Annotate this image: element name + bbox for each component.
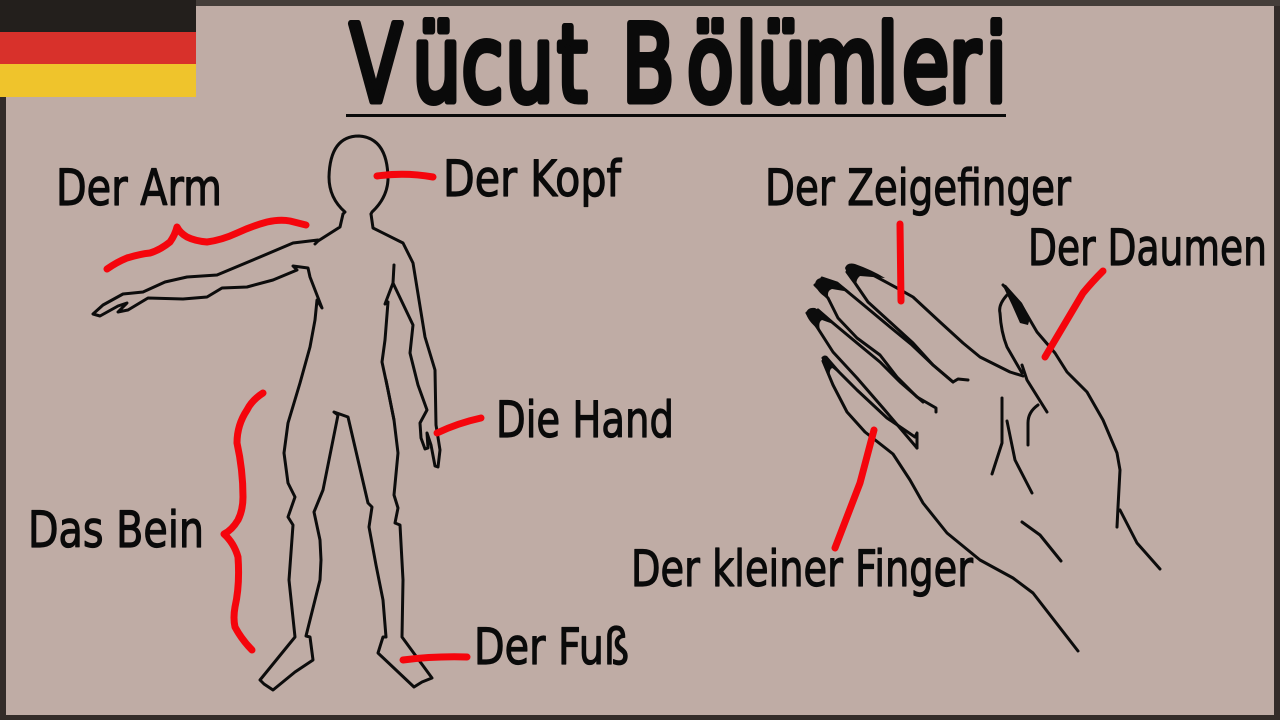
- flag: Germany: [0, 0, 196, 97]
- thumb and wrist: [992, 285, 1160, 569]
- label: Der Kopf: Der Kopf: [443, 150, 622, 208]
- red marker: foot line: [403, 657, 467, 660]
- little finger and hand edge: [823, 358, 1078, 651]
- hand drawing: [806, 264, 1160, 651]
- red marker: index finger line: [900, 224, 901, 301]
- label: Der Arm: Der Arm: [56, 159, 222, 217]
- middle finger: [815, 278, 953, 412]
- red marker: arm brace: [107, 220, 306, 269]
- label: Der Fuß: Der Fuß: [474, 618, 629, 676]
- red marker: little finger line: [835, 430, 874, 548]
- red marker: head line: [377, 174, 433, 177]
- body outline figure: [93, 136, 440, 690]
- red marker: thumb line: [1045, 271, 1103, 357]
- index finger: [847, 266, 1023, 382]
- head: [329, 136, 388, 214]
- ring finger: [807, 310, 923, 448]
- label: Der Zeigefinger: Der Zeigefinger: [765, 159, 1071, 217]
- label: Der kleiner Finger: Der kleiner Finger: [631, 540, 973, 598]
- red marker: hand line: [437, 418, 481, 433]
- right side and hanging arm: [371, 214, 440, 467]
- left side and outstretched arm: [93, 214, 432, 690]
- label: Die Hand: Die Hand: [496, 391, 674, 449]
- label: Das Bein: Das Bein: [28, 501, 204, 559]
- title: Vücut Bölümleri: [350, 2, 1007, 126]
- red marker: leg brace: [224, 393, 263, 650]
